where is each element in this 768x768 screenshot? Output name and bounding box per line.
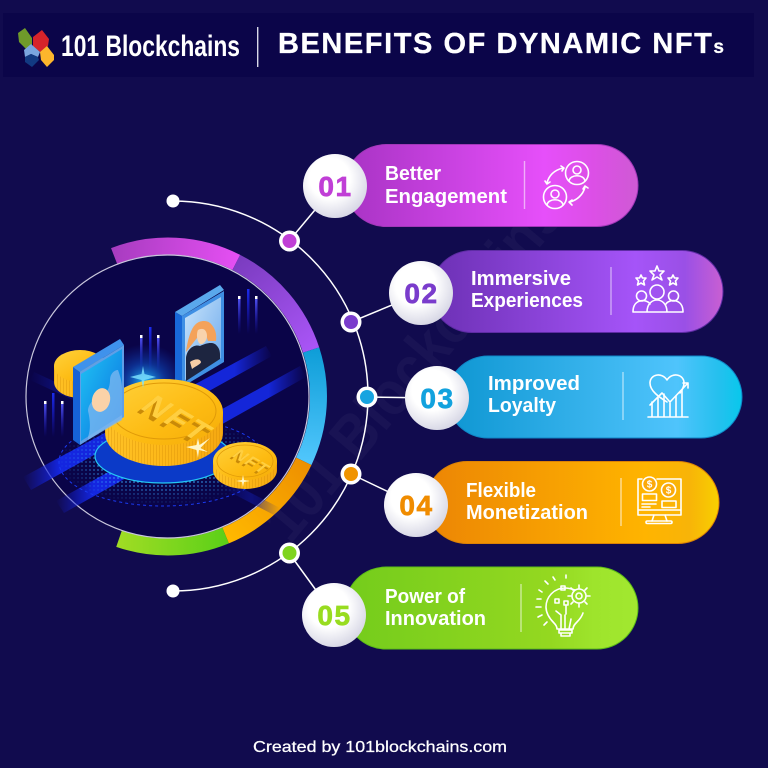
small coin lettering: NFT [228,447,274,477]
icon: exchange people [544,162,588,208]
illustration: NFT coins and frames [23,285,306,516]
label: Loyalty [488,395,557,417]
small coin lettering: NFT [226,449,272,479]
label: Immersive [471,268,571,290]
panel: benefit 04 [384,462,719,544]
colored progress ring [114,246,318,547]
small coin [213,442,277,489]
number badge 02 [389,261,453,325]
portrait: silhouette [88,370,122,440]
label: Power of [385,586,465,608]
label: Better [385,163,441,185]
node dots [279,230,378,564]
icon: heart and growth chart [648,375,688,417]
label: Monetization [466,502,588,524]
coin dollar signs: $ [647,480,653,490]
number badge 02: 02 [404,278,439,309]
coin dollar signs: $ [666,486,672,496]
panel: benefit 05 [302,567,638,649]
back coin [54,350,106,398]
label: Experiences [471,290,583,312]
number badge 01 [303,154,367,218]
connectors [289,186,437,615]
label [466,480,588,524]
label: Flexible [466,480,536,502]
title: BENEFITS OF DYNAMIC NFTs [278,28,724,60]
right portrait frame [175,285,224,387]
number badge 03: 03 [420,383,455,414]
header band [3,13,754,77]
coin lettering: NFT [134,390,221,447]
portrait: woman [186,321,220,381]
icon: monitor with coins [638,477,681,524]
floor dot pattern [62,429,254,503]
number badge 05: 05 [317,600,352,631]
panel: benefit 01 [303,144,638,226]
timeline arc [173,201,368,591]
watermark: 101 Blockchains [248,180,577,554]
label: Improved [488,373,580,395]
left portrait frame [73,339,124,445]
label [385,586,486,630]
label [471,268,583,312]
floor rings [59,418,267,506]
arc start dot [166,194,180,208]
number badge 03 [405,366,469,430]
coin lettering: NFT [130,393,217,450]
footer credit: Created by 101blockchains.com [253,739,507,756]
sparkles [130,366,250,487]
logo wordmark: 101 Blockchains [61,30,240,63]
label: Engagement [385,186,507,208]
label [488,373,580,417]
number badge 04: 04 [399,490,434,521]
light bars [44,289,258,437]
number badge 04 [384,473,448,537]
panel: benefit 03 [405,356,742,438]
main coin [105,379,223,466]
label: Innovation [385,608,486,630]
icon: logo cubes [18,28,54,67]
number badge 05 [302,583,366,647]
diagonal light bands [23,346,306,516]
coin dollar signs [647,480,672,496]
icon: lightbulb with gear [536,575,590,636]
illustration disc [26,255,309,538]
panel: benefit 02 [389,250,723,332]
label [385,163,507,208]
number badge 01: 01 [318,171,353,202]
arc end dot [166,584,180,598]
glow behind coin [103,344,187,420]
icon: group with stars [633,266,683,312]
